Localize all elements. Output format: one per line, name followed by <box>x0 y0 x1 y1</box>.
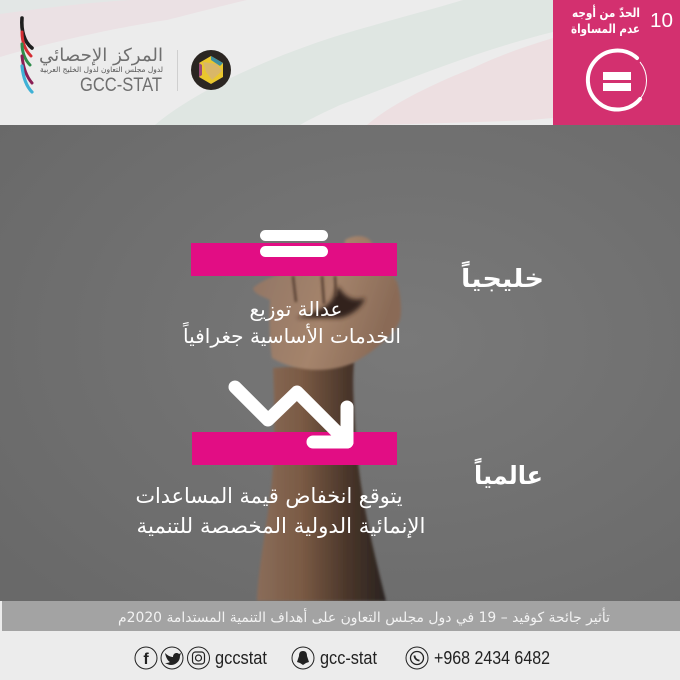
icon: whatsapp <box>406 647 428 669</box>
global body text: يتوقع انخفاض قيمة المساعدات <box>136 484 403 508</box>
global body text: الإنمائية الدولية المخصصة للتنمية <box>136 514 426 538</box>
gulf body text: عدالة توزيع <box>250 297 342 321</box>
global pink bar <box>192 432 397 465</box>
caption text: تأثير جائحة كوفيد – 19 في دول مجلس التعاون على أهداف التنمية المستدامة 2020م <box>118 607 610 626</box>
panel: gulf section <box>183 230 544 348</box>
icon: falling arrow <box>235 387 347 442</box>
photo panel: wall with raised fist <box>0 125 680 601</box>
gulf heading: خليجياً <box>461 261 544 293</box>
header background <box>0 0 680 125</box>
logo ribbon <box>22 18 32 92</box>
icon: twitter <box>161 647 183 669</box>
logo divider <box>177 50 178 91</box>
fist photo <box>253 236 401 601</box>
gulf body text: الخدمات الأساسية جغرافياً <box>183 322 401 348</box>
footer contacts <box>0 631 680 680</box>
global body text <box>136 484 426 538</box>
logo subtitle: لدول مجلس التعاون لدول الخليج العربية <box>40 65 163 74</box>
icon: facebook <box>135 647 157 669</box>
goal title: عدم المساواة <box>571 21 640 37</box>
icon: equals sign <box>260 230 328 257</box>
panel: global section <box>136 387 543 538</box>
goal title: الحدّ من أوجه <box>572 4 640 20</box>
logo latin name: GCC-STAT <box>80 75 162 96</box>
caption strip <box>0 601 680 631</box>
gulf body text <box>183 297 401 348</box>
handle gccstat: gccstat <box>215 648 267 668</box>
icon: facebook: f <box>143 651 149 668</box>
gulf pink bar <box>191 243 397 276</box>
global heading: عالمياً <box>474 458 543 490</box>
icon: instagram <box>188 647 210 669</box>
goal number: 10 <box>650 10 673 32</box>
handle gcc-stat: gcc-stat <box>320 648 377 668</box>
goal 10 panel <box>553 0 680 125</box>
phone number: +968 2434 6482 <box>434 648 550 668</box>
icon: GCC emblem <box>191 50 231 90</box>
icon: equality ring <box>588 51 647 110</box>
goal title <box>571 4 640 37</box>
GCC-STAT logo <box>22 18 231 96</box>
logo arabic name: المركز الإحصائي <box>39 45 163 66</box>
icon: snapchat <box>292 647 314 669</box>
